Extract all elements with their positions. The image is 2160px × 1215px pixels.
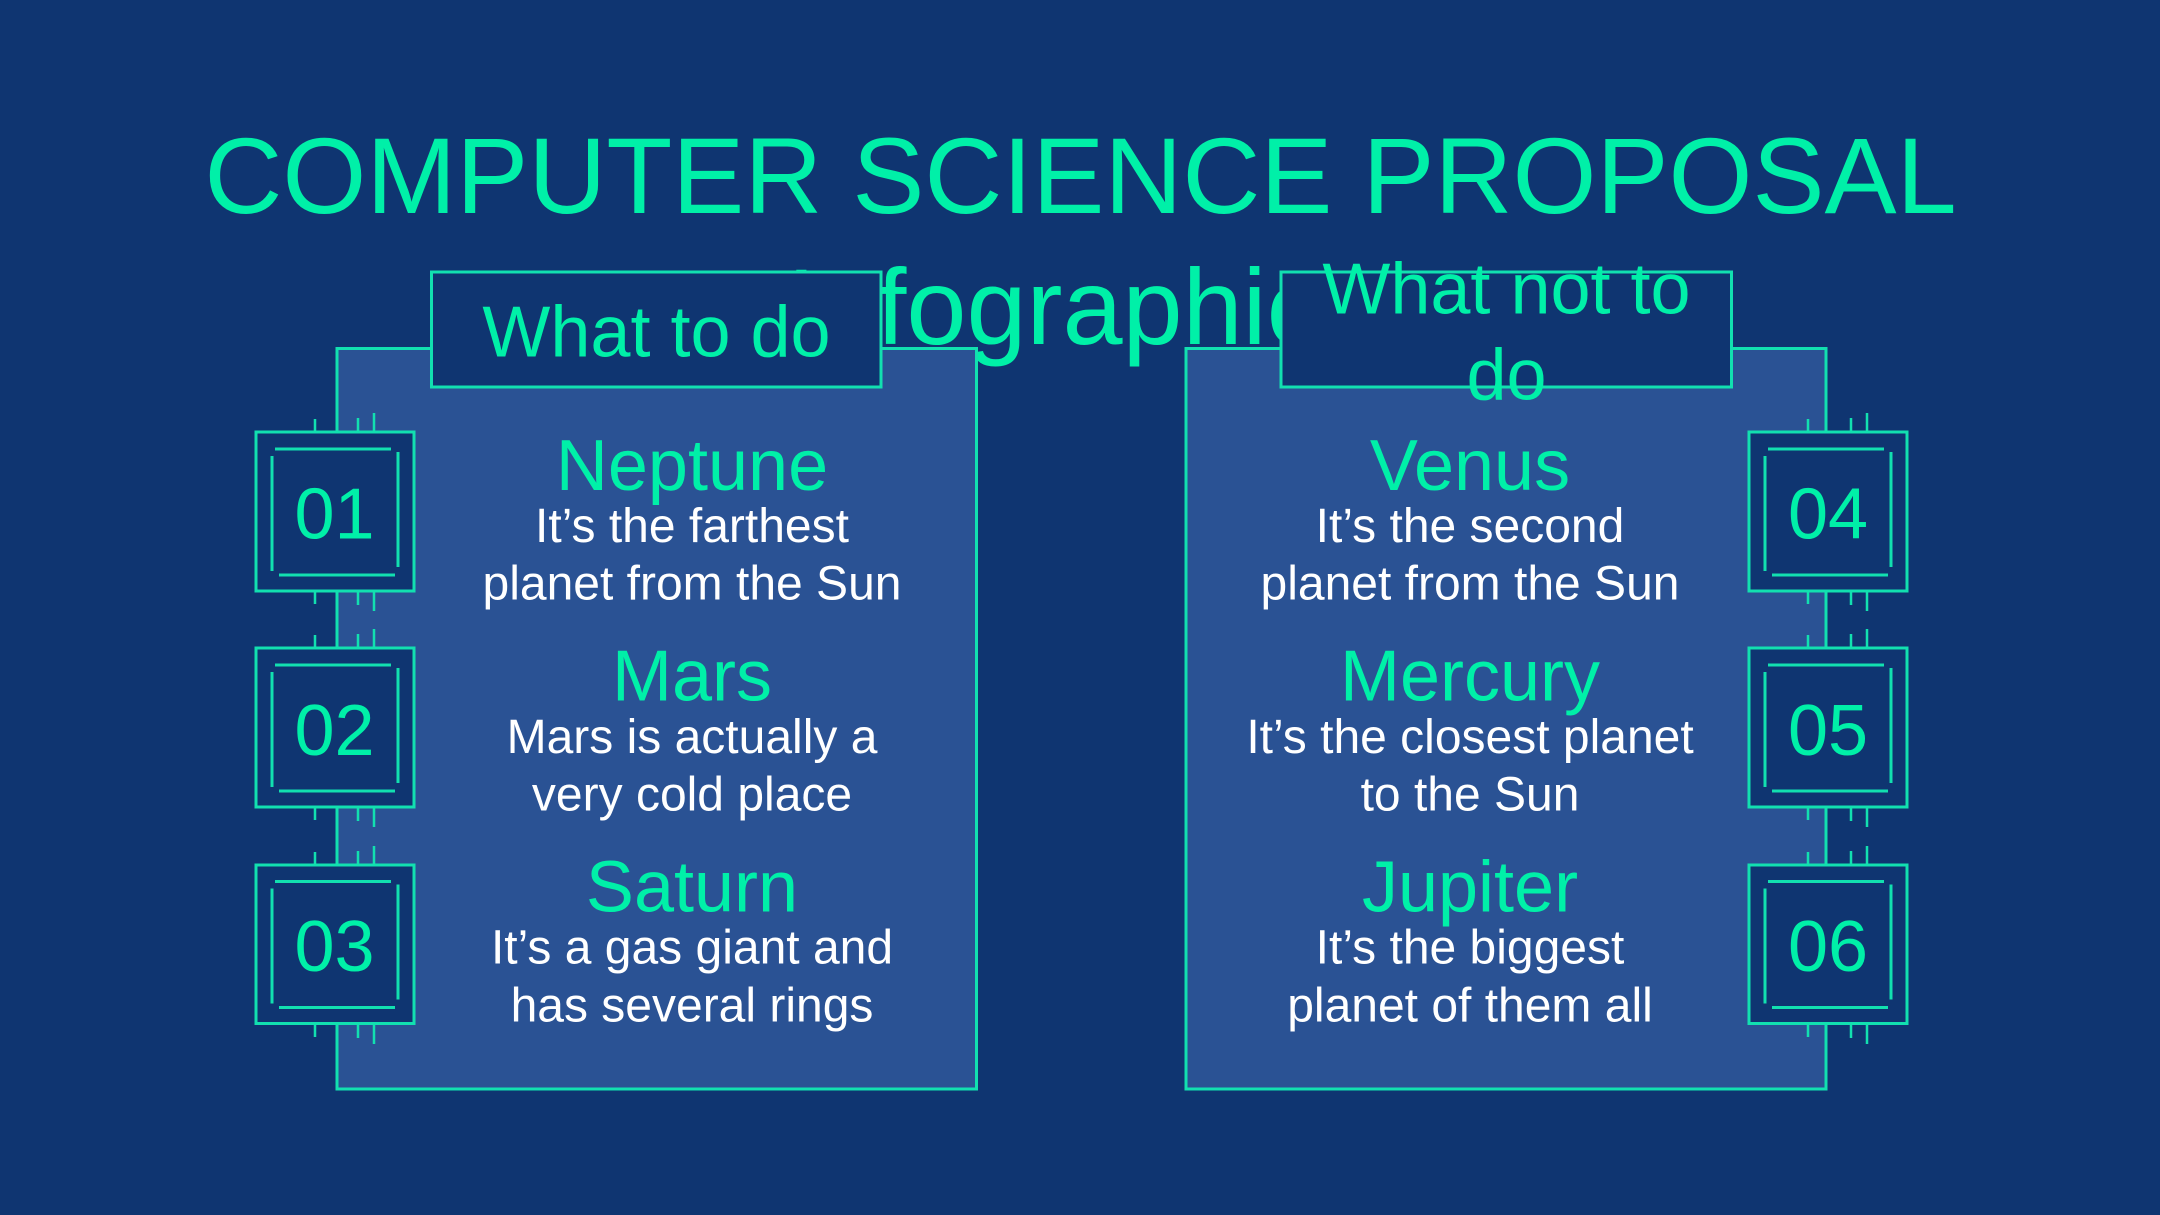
item: Saturn xyxy=(491,848,893,1032)
heading: what not to do: do xyxy=(1466,336,1547,416)
title xyxy=(204,115,1957,367)
panel: what not to do xyxy=(1186,348,1826,1089)
chip 06 xyxy=(1749,846,1907,1044)
item: Jupiter: It’s the biggest xyxy=(1316,922,1624,974)
chip 02 xyxy=(256,629,414,827)
item: Venus xyxy=(1261,426,1679,610)
item: Mars: Mars is actually a xyxy=(507,711,878,764)
chip 03: 03 xyxy=(294,907,375,987)
item: Mercury: Mercury xyxy=(1340,636,1600,716)
chip 02: 02 xyxy=(294,691,375,771)
item: Mars: very cold place xyxy=(532,768,852,822)
item: Mercury: It’s the closest planet xyxy=(1246,711,1694,764)
chip 04: 04 xyxy=(1788,474,1868,554)
item: Saturn: Saturn xyxy=(586,848,798,928)
item: Jupiter xyxy=(1287,848,1653,1032)
chip 04 xyxy=(1749,413,1907,611)
item: Venus: planet from the Sun xyxy=(1261,558,1679,610)
item: Saturn: has several rings xyxy=(511,980,873,1032)
item: Neptune: planet from the Sun xyxy=(483,558,901,610)
panel: what to do xyxy=(337,348,976,1089)
item: Venus: It’s the second xyxy=(1316,500,1624,553)
chip 01: 01 xyxy=(294,474,375,554)
item: Mercury xyxy=(1246,636,1694,822)
chip 01 xyxy=(256,413,414,611)
heading: what not to do xyxy=(1281,250,1732,416)
heading: what to do: What to do xyxy=(482,292,831,372)
item: Saturn: It’s a gas giant and xyxy=(491,922,893,974)
item: Neptune: It’s the farthest xyxy=(535,500,849,553)
item: Neptune: Neptune xyxy=(556,426,828,506)
chip 05: 05 xyxy=(1788,691,1868,771)
item: Mercury: to the Sun xyxy=(1361,768,1579,822)
item: Venus: Venus xyxy=(1370,426,1570,506)
chip 06: 06 xyxy=(1788,907,1868,987)
item: Jupiter: Jupiter xyxy=(1362,848,1578,928)
item: Mars: Mars xyxy=(612,636,772,716)
chip 03 xyxy=(256,846,414,1044)
heading: what not to do: What not to xyxy=(1322,250,1691,330)
item: Jupiter: planet of them all xyxy=(1287,980,1653,1032)
heading: what to do xyxy=(432,272,881,387)
title: Infographics xyxy=(786,246,1375,367)
chip 05 xyxy=(1749,629,1907,827)
title: COMPUTER SCIENCE PROPOSAL xyxy=(204,115,1957,236)
item: Mars xyxy=(507,636,878,822)
item: Neptune xyxy=(483,426,901,610)
